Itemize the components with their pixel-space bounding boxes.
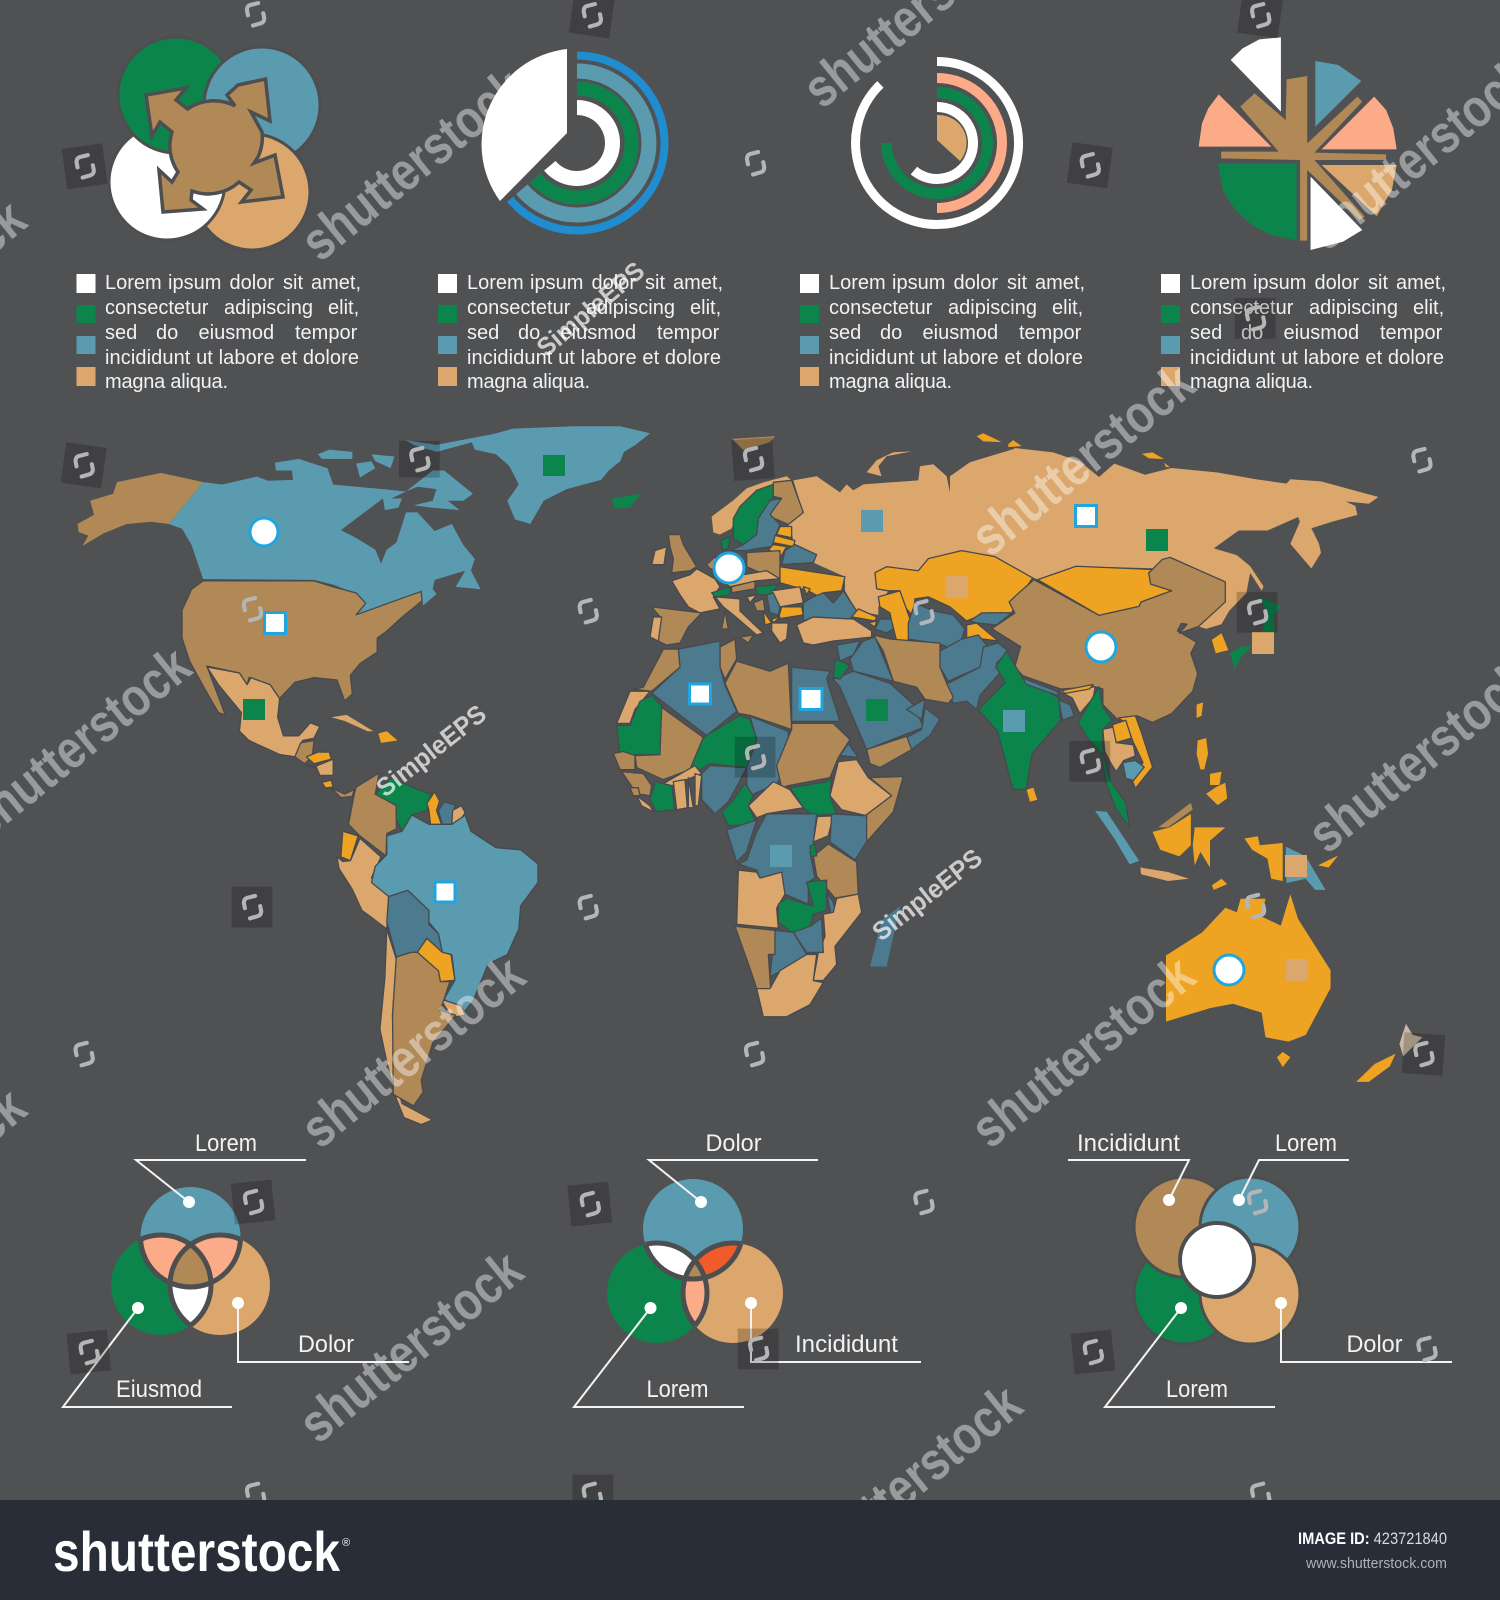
label: Lorem: Lorem <box>195 1130 257 1157</box>
legend: column 1: consectetur <box>105 297 209 319</box>
legend: column 2: dolor <box>592 272 636 294</box>
venn diagram 2 <box>574 1130 921 1407</box>
label: Eiusmod: Eiusmod <box>116 1376 202 1403</box>
legend: column 4: eiusmod <box>1284 322 1359 344</box>
legend: column 4 <box>1161 272 1446 393</box>
legend: column 1 <box>76 272 361 393</box>
label: Lorem <box>574 1302 744 1407</box>
legend: column 1: magna aliqua. <box>105 371 228 393</box>
legend: column 3 <box>800 272 1085 393</box>
legend: column 2: do <box>518 322 540 344</box>
label: Incididunt: Incididunt <box>1077 1130 1180 1157</box>
image id: IMAGE ID: 423721840 <box>1298 1529 1447 1548</box>
label: Dolor <box>649 1130 818 1208</box>
label: Lorem <box>1105 1302 1275 1407</box>
legend: column 1: elit, <box>328 297 359 319</box>
legend: column 4: sit <box>1368 272 1388 294</box>
legend: column 1: eiusmod <box>198 322 274 344</box>
legend: column 1: sed <box>105 322 137 344</box>
legend: column 2: adipiscing <box>586 297 675 319</box>
legend: column 4: incididunt ut labore et dolore <box>1190 347 1444 369</box>
legend: column 2: amet, <box>673 272 723 294</box>
legend: column 3: magna aliqua. <box>829 371 952 393</box>
legend: column 4: ipsum <box>1253 272 1306 294</box>
map: the Americas <box>78 426 650 1125</box>
legend: column 4: tempor <box>1380 322 1443 344</box>
legend: column 4: elit, <box>1413 297 1444 319</box>
legend: column 2: incididunt ut labore et dolore <box>467 347 721 369</box>
legend: column 4: do <box>1241 322 1263 344</box>
legend: column 4: Lorem <box>1190 272 1247 294</box>
legend: column 2: magna aliqua. <box>467 371 590 393</box>
map: eastern Russia <box>961 448 1378 629</box>
chart: radial arcs <box>856 61 1019 224</box>
venn diagram 1 <box>63 1130 409 1407</box>
legend: column 1: incididunt ut labore et dolore <box>105 347 359 369</box>
label: Incididunt: Incididunt <box>795 1331 898 1358</box>
label: Lorem <box>136 1130 306 1208</box>
label: Incididunt <box>1068 1130 1189 1206</box>
legend: column 4: sed <box>1190 322 1222 344</box>
legend: column 3: sed <box>829 322 861 344</box>
legend: column 3: do <box>880 322 902 344</box>
chart: exploded pie with brown star <box>1199 37 1397 250</box>
legend: column 4: amet, <box>1396 272 1446 294</box>
legend: column 2: Lorem <box>467 272 524 294</box>
legend: column 1: do <box>156 322 178 344</box>
watermark text: shutterstock <box>290 944 536 1159</box>
legend: column 2: elit, <box>690 297 721 319</box>
legend: column 3: incididunt ut labore et dolore <box>829 347 1083 369</box>
legend: column 3: dolor <box>954 272 998 294</box>
legend: column 4: consectetur <box>1190 297 1294 319</box>
legend: column 2: tempor <box>657 322 720 344</box>
legend: column 3: consectetur <box>829 297 933 319</box>
legend: column 1: sit <box>283 272 303 294</box>
footer bar <box>0 1500 1500 1600</box>
watermark text: shutterstock <box>960 352 1206 567</box>
label: Lorem: Lorem <box>646 1376 708 1403</box>
legend: column 4: adipiscing <box>1309 297 1398 319</box>
footer logo: ® <box>342 1537 350 1549</box>
venn diagram 3 <box>1068 1130 1452 1407</box>
legend: column 3: elit, <box>1052 297 1083 319</box>
legend: column 3: adipiscing <box>948 297 1037 319</box>
label: Dolor: Dolor <box>706 1130 762 1157</box>
legend: column 3: ipsum <box>892 272 945 294</box>
legend: column 2: eiusmod <box>560 322 636 344</box>
legend: column 1: adipiscing <box>224 297 313 319</box>
legend: column 3: amet, <box>1035 272 1085 294</box>
watermark text: shutterstock <box>288 1239 534 1454</box>
legend: column 2: sit <box>645 272 665 294</box>
map markers: squares <box>243 455 1308 981</box>
legend: column 2: ipsum <box>530 272 583 294</box>
label: Lorem <box>1233 1130 1349 1206</box>
chart: concentric rings with white wedge <box>482 49 664 231</box>
legend: column 1: Lorem <box>105 272 162 294</box>
label: Dolor: Dolor <box>1346 1331 1402 1358</box>
watermark text: shutterstock <box>787 1373 1033 1588</box>
icon: four-way arrow <box>146 79 283 212</box>
label: Dolor <box>232 1297 409 1362</box>
map: Asia and Oceania <box>978 557 1422 1082</box>
label: Eiusmod <box>63 1302 232 1407</box>
label: Incididunt <box>745 1297 921 1362</box>
watermark text: SimpleEPS <box>866 842 988 947</box>
watermark text: SimpleEPS <box>531 255 650 363</box>
label: Lorem: Lorem <box>1275 1130 1337 1157</box>
legend: column 4: dolor <box>1314 272 1359 294</box>
watermark text: SimpleEPS <box>370 698 492 803</box>
legend: column 1: tempor <box>295 322 358 344</box>
legend: column 2: sed <box>467 322 499 344</box>
legend: column 1: ipsum <box>168 272 221 294</box>
legend: column 2: consectetur <box>467 297 571 319</box>
legend: column 1: dolor <box>230 272 274 294</box>
legend: column 1: amet, <box>311 272 361 294</box>
legend: column 4: magna aliqua. <box>1190 371 1313 393</box>
chart: four circles with arrows <box>109 37 320 250</box>
label: Dolor <box>1275 1297 1452 1362</box>
watermark text: shutterstock <box>960 944 1206 1159</box>
map markers: white circles <box>250 518 1244 985</box>
watermark text: shutterstock <box>290 57 536 272</box>
website: www.shutterstock.com <box>1305 1555 1447 1572</box>
label: Lorem: Lorem <box>1166 1376 1228 1403</box>
legend: column 3: Lorem <box>829 272 886 294</box>
legend: column 3: tempor <box>1019 322 1082 344</box>
world map <box>78 426 1422 1125</box>
label: Dolor: Dolor <box>298 1331 354 1358</box>
legend: column 2 <box>438 272 723 393</box>
footer logo: shutterstock <box>53 1520 341 1583</box>
map: Europe, Africa and Middle East <box>613 433 1037 1017</box>
legend: column 3: eiusmod <box>922 322 998 344</box>
legend: column 3: sit <box>1007 272 1027 294</box>
